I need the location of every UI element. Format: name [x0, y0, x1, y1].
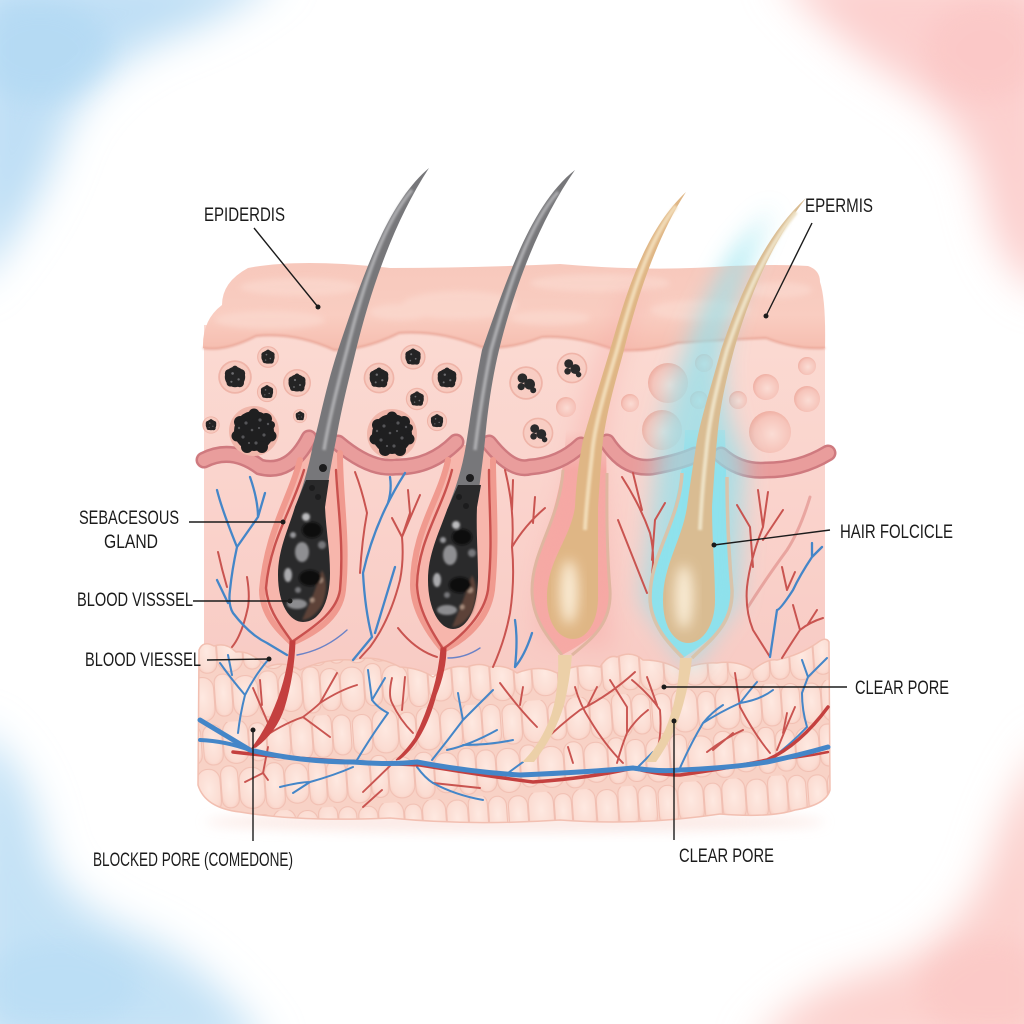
comedone plug	[278, 480, 330, 622]
subcutaneous fat layer	[198, 639, 830, 823]
follicle sacs	[262, 430, 732, 658]
hair shaft	[295, 168, 429, 507]
label: clear pore 1: CLEAR PORE	[855, 678, 949, 699]
basement band	[204, 438, 828, 470]
label: epidermis: EPIDERDIS	[204, 205, 285, 226]
label: blocked pore: BLOCKED PORE (COMEDONE)	[93, 850, 293, 871]
main vessel trunks	[233, 707, 828, 782]
soft shadow under skin block	[205, 812, 825, 832]
clear follicle 4	[645, 198, 806, 762]
label: clear pore 2: CLEAR PORE	[679, 846, 774, 867]
clear pores: empty cysts	[556, 354, 820, 453]
glow around third follicle	[538, 290, 645, 650]
label lines	[189, 223, 847, 841]
epidermis layer	[203, 263, 825, 350]
clear follicle 3	[522, 192, 686, 762]
label: sebaceous gland: SEBACESOUS	[79, 508, 179, 529]
dark hair follicle 2 with blocked pore	[396, 170, 575, 760]
label: sebaceous gland: GLAND	[104, 532, 158, 553]
label: epidermis right: EPERMIS	[805, 196, 873, 217]
follicle walls	[413, 460, 495, 650]
panel: skin cross-section	[198, 168, 830, 832]
label: blood vessel 2: BLOOD VIESSEL	[85, 650, 201, 671]
label: blood vessel 1: BLOOD VISSSEL	[77, 590, 193, 611]
blocked pores: comedones in upper dermis	[202, 344, 587, 459]
label: sebaceous gland	[79, 508, 179, 553]
label: hair follicle: HAIR FOLCICLE	[840, 522, 953, 543]
stem vessel	[252, 641, 295, 748]
dark hair follicle 1 with blocked pore	[252, 168, 429, 748]
cyan glow around clear follicle	[642, 205, 775, 670]
comedone plug	[428, 485, 481, 629]
stem vessel	[396, 648, 446, 760]
hair shaft	[447, 170, 575, 510]
follicle walls	[262, 453, 345, 643]
dermis layer	[204, 325, 825, 675]
capillaries in fat layer	[245, 672, 795, 807]
blood vessels in dermis	[200, 470, 828, 807]
